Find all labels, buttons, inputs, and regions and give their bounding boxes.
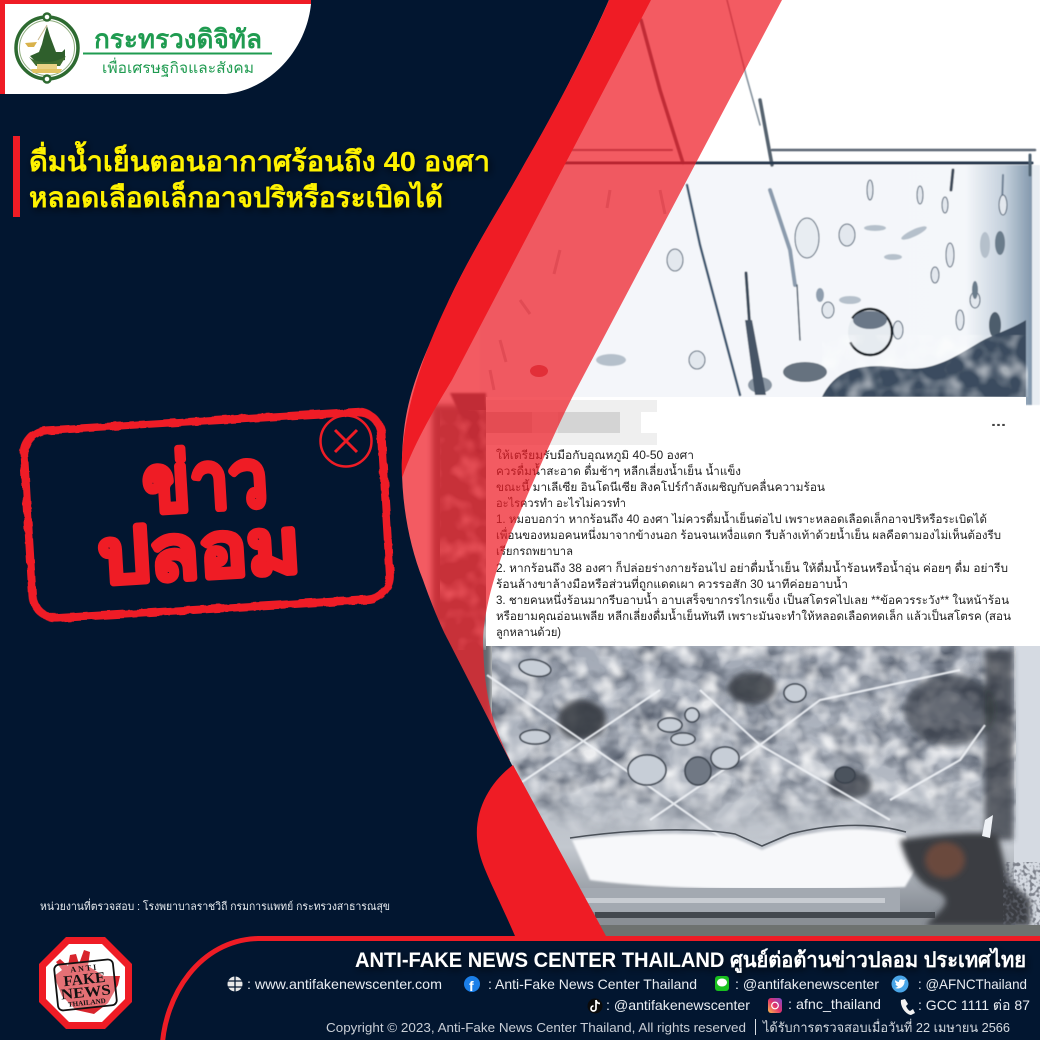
dark patches	[558, 650, 1013, 840]
post text: 2. หากร้อนถึง 38 องศา ก็ปล่อยร่างกายร้อนไป อย่าดื่มน้ำเย็น ให้ดื่มน้ำร้อนหรือน้ำอุ่น ค่อยๆ ดื่ม อย่ารีบ	[496, 560, 1008, 575]
source agency note: หน่วยงานที่ตรวจสอบ : โรงพยาบาลราชวิถี กรมการแพทย์ กระทรวงสาธารณสุข	[40, 898, 390, 913]
bubbles	[518, 657, 855, 785]
headline	[13, 136, 490, 217]
anti fake news logo: NEWS	[60, 982, 112, 1004]
hotline: : GCC 1111 ต่อ 87	[918, 997, 1030, 1013]
twitter id: : @AFNCThailand	[918, 976, 1027, 992]
verification date: ได้รับการตรวจสอบเมื่อวันที่ 22 เมษายน 2566	[762, 1019, 1010, 1035]
dark corner	[900, 833, 1030, 926]
lower cut glass	[487, 646, 1040, 936]
post text: เรียกรถพยาบาล	[496, 545, 573, 558]
screenshot card: fake-news post	[486, 397, 1026, 646]
post text: อะไรควรทำ อะไรไม่ควรทำ	[496, 497, 626, 510]
website: : www.antifakenewscenter.com	[247, 976, 442, 992]
icon: phone	[901, 999, 915, 1015]
menu dots: ...	[991, 413, 1006, 429]
line id: : @antifakenewscenter	[735, 976, 879, 992]
left side seen through the red band	[432, 190, 665, 745]
headline: ดื่มน้ำเย็นตอนอากาศร้อนถึง 40 องศา	[29, 140, 490, 177]
post text	[496, 449, 1011, 639]
upper glass body	[480, 0, 1040, 405]
facebook name: : Anti-Fake News Center Thailand	[488, 976, 697, 992]
post text: หรือยามคุณอ่อนเพลีย หลีกเลี่ยงดื่มน้ำเย็นทันที เพราะมันจะทำให้หลอดเลือดหดเล็ก แล้วเป็นสโตรค (สอน	[496, 608, 1011, 623]
photo: glass of water	[380, 0, 1040, 936]
tiktok id: : @antifakenewscenter	[606, 997, 750, 1013]
crystal cut lines	[487, 670, 985, 868]
solid red diagonal band	[402, 0, 651, 478]
post text: ร้อนล้างขาล้างมือหรือส่วนที่ถูกแดดเผา ควรรอสัก 30 นาทีค่อยอาบน้ำ	[496, 576, 848, 591]
anti fake news logo: FAKE	[63, 970, 106, 990]
icon: x in circle	[320, 416, 372, 466]
post text: ให้เตรียมรับมือกับอุณหภูมิ 40-50 องศา	[496, 449, 694, 462]
anti fake news logo: ANTI	[70, 963, 97, 974]
droplets	[667, 180, 1007, 369]
red blob at glass base	[477, 765, 606, 936]
post text: 3. ชายคนหนึ่งร้อนมากรีบอาบน้ำ อาบเสร็จขากรรไกรแข็ง เป็นสโตรคไปเลย **ข้อควรระวัง** ในหน้าร้อน	[496, 592, 1009, 607]
white mound at the base	[572, 829, 915, 890]
headline: หลอดเลือดเล็กอาจปริหรือระเบิดได้	[29, 180, 443, 213]
footer panel	[162, 938, 1040, 1040]
ministry tagline: เพื่อเศรษฐกิจและสังคม	[102, 57, 254, 77]
icon: instagram	[768, 998, 782, 1013]
fake news stamp: ข่าว	[140, 433, 270, 530]
instagram id: : afnc_thailand	[788, 996, 881, 1012]
post text: ลูกหลานด้วย)	[496, 626, 561, 639]
icon: globe	[228, 976, 242, 992]
post text: เพื่อนของหมอคนหนึ่งมาจากข้างนอก ร้อนจนเหงื่อแตก รีบล้างเท้าด้วยน้ำเย็น ผลคือตามองไม่เห็นต้องรีบ	[496, 527, 1001, 542]
fake news stamp: ปลอม	[96, 504, 303, 600]
icon: facebook	[464, 976, 480, 994]
navy left panel	[0, 0, 609, 1040]
ministry emblem	[16, 14, 78, 82]
dark base of upper glass	[822, 320, 1026, 397]
fake news stamp	[23, 411, 391, 619]
anti fake news logo	[39, 937, 132, 1029]
icon: twitter	[892, 976, 908, 992]
bottom bands	[580, 888, 900, 912]
post text: ควรดื่มน้ำสะอาด ดื่มช้าๆ หลีกเลี่ยงน้ำเย็น น้ำแข็ง	[496, 463, 741, 478]
ministry name: กระทรวงดิจิทัล	[94, 24, 262, 54]
icon: facebook: f	[469, 978, 474, 994]
header logo panel	[0, 0, 311, 94]
post text: 1. หมอบอกว่า หากร้อนถึง 40 องศา ไม่ควรดื่มน้ำเย็นต่อไป เพราะหลอดเลือดเล็กอาจปริหรือระเบิดได้	[496, 511, 987, 526]
footer title: ANTI-FAKE NEWS CENTER THAILAND ศูนย์ต่อต้านข่าวปลอม ประเทศไทย	[355, 947, 1026, 974]
blurred account name	[486, 400, 657, 445]
footer contacts	[228, 976, 1030, 1035]
anti fake news logo: THAILAND	[68, 997, 106, 1009]
post text: ขณะนี้ มาเลีเซีย อินโดนีเซีย สิงคโปร์กำลังเผชิญกับคลื่นความร้อน	[496, 479, 825, 494]
copyright: Copyright © 2023, Anti-Fake News Center Thailand, All rights reserved	[326, 1020, 746, 1035]
translucent red diagonal band	[380, 0, 782, 760]
icon: line	[715, 976, 729, 991]
icon: tiktok	[588, 998, 602, 1014]
